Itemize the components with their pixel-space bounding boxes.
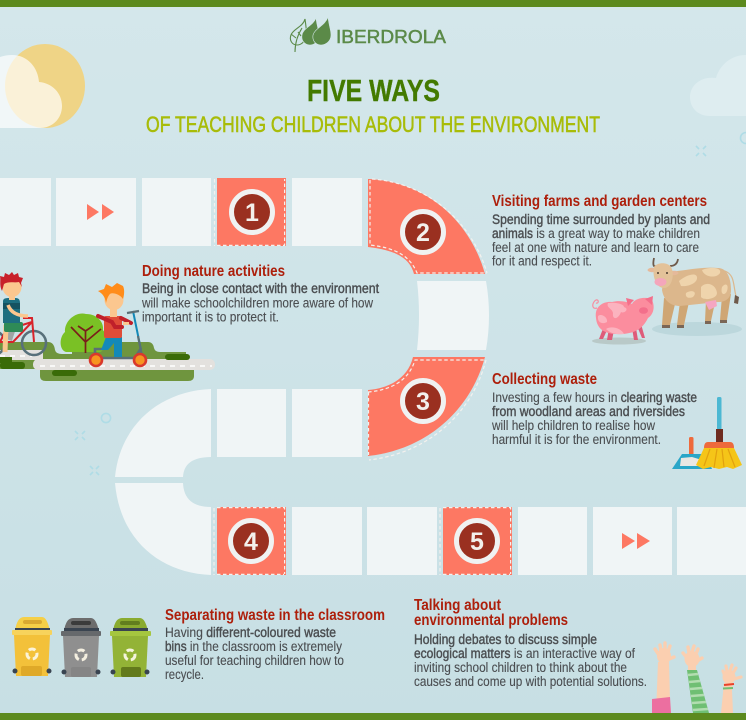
text block: talking about environmental problems: Holding debates to discuss simple [414,632,597,647]
title: FIVE WAYS [307,73,440,108]
illustration: raised hands [652,643,741,713]
text block: collecting waste: Investing a few hours in clearing waste [492,390,697,405]
text block: doing nature activities: Being in close contact with the environment [142,281,379,296]
text block: visiting farms: feel at one with nature and learn to care [492,240,699,255]
text block: separating waste [165,607,385,682]
step 2 curve [368,179,487,274]
illustration: cow [648,258,742,336]
text block: collecting waste: from woodland areas and riversides [492,404,685,419]
text block: collecting waste: Collecting waste [492,371,597,388]
logo: Iberdrola [290,17,447,52]
second row tiles [217,389,362,457]
step 5 tile: 5 [470,528,484,556]
step 4 tile [214,507,286,575]
top bar [0,0,746,7]
text block: doing nature activities [141,263,379,324]
text block: collecting waste: will help children to realise how [491,418,655,433]
text block: visiting farms [492,193,710,268]
illustration: park road with children [0,272,215,381]
left hand [652,643,674,713]
text block: separating waste: useful for teaching children how to [165,653,344,668]
text block: visiting farms: Spending time surrounded by plants and [492,212,710,227]
arrow: fast forward top [87,204,114,220]
illustration: pig [592,296,654,344]
yellow bin [12,617,52,676]
text block: separating waste: bins in the classroom is extremely [165,639,342,654]
middle curved tile [417,281,489,350]
text block: collecting waste: harmful it is for the environment. [492,432,661,447]
road [0,350,215,370]
bottom bar [0,713,746,720]
text block: separating waste: Having different-coloured waste [165,625,336,640]
illustration: dustpan and broom [672,397,742,469]
text block: visiting farms: for it and respect it. [492,254,592,268]
icon: sun behind cloud [0,44,85,128]
logo: Iberdrola: IBERDROLA [336,26,447,47]
grass [0,342,194,381]
child on scooter [90,283,146,366]
text block: talking about environmental problems: causes and come up with potential solutions. [414,674,647,689]
top row tiles [0,178,362,246]
icon: cloud right [690,55,746,116]
step 4 tile: 4 [244,528,258,556]
middle hand [683,646,709,713]
step 5 tile [440,507,512,575]
left curved tiles [115,389,211,575]
decorative sparkles [75,132,746,475]
text block: talking about environmental problems [414,597,647,689]
text block: talking about environmental problems: Talking about [414,597,501,614]
illustration: recycling bins [12,617,151,677]
step 1 tile [214,178,286,246]
text block: visiting farms: Visiting farms and garden centers [492,193,707,210]
subtitle: OF TEACHING CHILDREN ABOUT THE ENVIRONMENT [146,112,600,137]
text block: doing nature activities: will make schoolchildren more aware of how [141,296,373,310]
child on bicycle [0,272,46,355]
text block: doing nature activities: Doing nature activities [142,263,285,280]
step 3 curve [368,357,486,460]
text block: doing nature activities: important it is to protect it. [142,310,279,324]
green bin [110,618,151,677]
grass tufts [0,354,190,376]
step 3 curve: 3 [416,388,430,416]
text block: separating waste: recycle. [165,667,204,682]
right hand [721,665,741,713]
bottom row tiles [292,507,746,575]
text block: collecting waste [491,371,697,447]
text block: talking about environmental problems: ecological matters is an interactive way of [414,646,635,661]
step 2 curve: 2 [416,219,430,247]
text block: talking about environmental problems: environmental problems [414,612,568,629]
text block: visiting farms: animals is a great way to make children [492,226,700,241]
text block: separating waste: Separating waste in the classroom [165,607,385,624]
bush [61,313,107,353]
text block: talking about environmental problems: inviting school children to think about the [414,660,627,675]
grey bin [61,618,101,677]
arrow: fast forward bottom [622,533,650,549]
board track [0,178,746,575]
step 1 tile: 1 [245,199,259,227]
